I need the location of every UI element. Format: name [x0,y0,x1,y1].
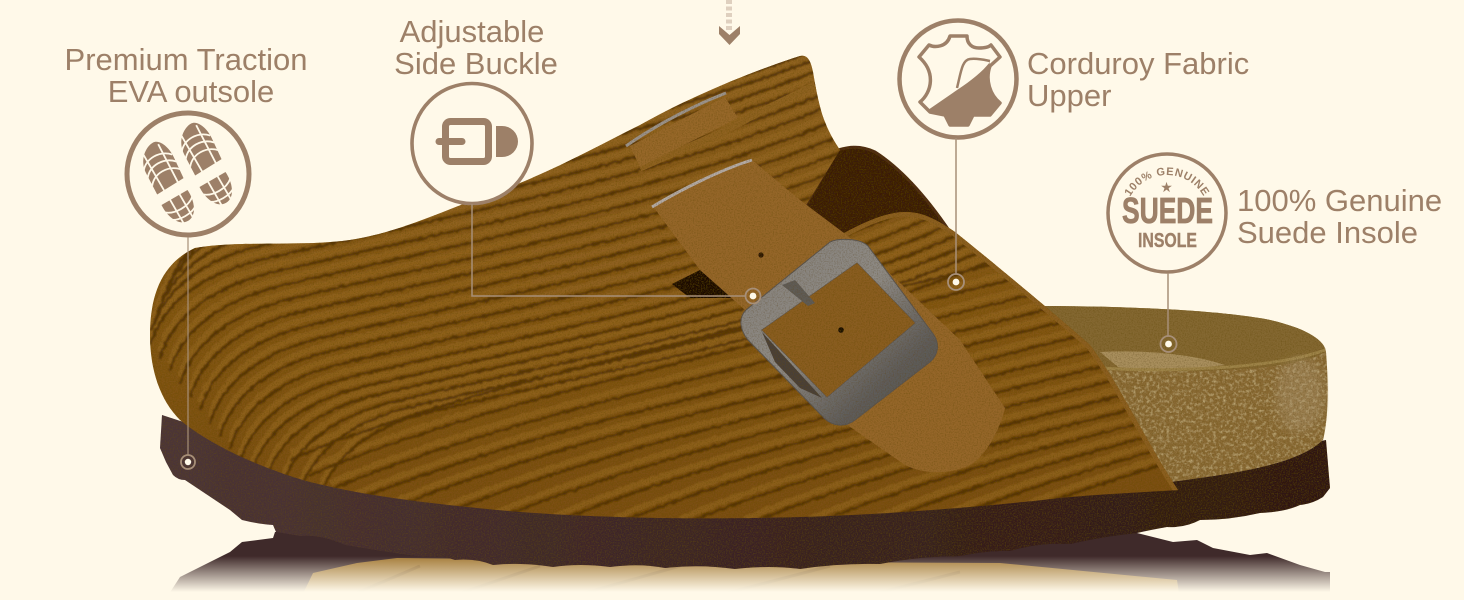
label text: Corduroy Fabric [1027,46,1249,81]
icon: belt buckle [412,84,532,204]
inner lining [800,147,950,240]
corduroy upper [150,56,1178,518]
callout: buckle [394,14,760,304]
icon: suede stamp: ★ [1160,180,1173,196]
label text: EVA outsole [108,74,274,109]
callout: outsole [65,42,307,469]
shoe reflection [150,530,1350,600]
cork heel and insole [1040,306,1328,482]
callout: suede insole [1106,152,1442,353]
label text: Side Buckle [394,46,558,81]
label text: Adjustable [400,14,544,49]
strap slit [672,270,735,298]
icon: leather hide [900,20,1016,138]
icon: suede stamp [1106,152,1228,274]
connector and dot [181,237,195,469]
icon: boot soles [127,113,249,235]
keeper loop [626,93,738,167]
label text: Suede Insole [1237,215,1418,250]
shoe [150,56,1330,569]
icon: suede stamp: INSOLE [1138,230,1197,252]
suede strap [652,160,1005,472]
label text: 100% Genuine [1237,183,1442,218]
outsole [160,415,1330,569]
arrow down [719,0,740,45]
label text: Premium Traction [65,42,307,77]
metal buckle [741,239,937,425]
icon: suede stamp: SUEDE [1122,190,1213,231]
callout: corduroy fabric [900,20,1249,290]
connector and dot [472,204,760,304]
label text: Upper [1027,78,1111,113]
icon: suede stamp: 100% GENUINE [1125,167,1210,196]
connector and dot [948,138,964,290]
connector and dot [1160,273,1176,352]
